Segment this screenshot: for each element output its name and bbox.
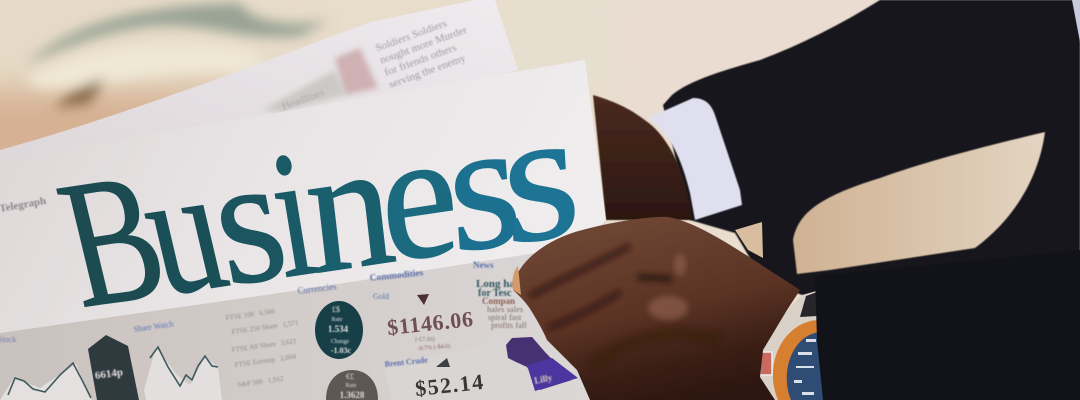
Commodities column: -0.7% (-$4.6) (417, 343, 450, 352)
front newspaper page (0, 60, 606, 400)
watch bezel (773, 320, 826, 400)
left line chart (0, 335, 92, 400)
blurred small text on back sheet: Soldiers Soldiers (374, 17, 448, 54)
data table: FTSE 250 Share 1,571 (231, 319, 299, 336)
cuff edge of near sleeve (815, 250, 1080, 400)
purple stat icon: Lilly (533, 372, 554, 386)
front hand with fingers (512, 217, 800, 400)
News column: News (473, 260, 494, 270)
teal currency badge (315, 301, 363, 359)
teal currency badge: Change (331, 339, 350, 345)
fingernail (512, 266, 521, 295)
blurred small text on back sheet: nought more Murder (378, 24, 469, 67)
data table (225, 307, 299, 389)
News column: Long ha (476, 278, 515, 290)
data table: S&P 500 1,912 (237, 375, 285, 389)
dark pentagon stat tag (88, 335, 139, 400)
teal currency badge: -1.03c (331, 346, 352, 355)
headline: Business: e (371, 91, 466, 302)
News column: profits fall (491, 320, 527, 330)
grey currency badge: €£ (346, 372, 354, 381)
blurred picture on back sheet (335, 48, 378, 95)
data table: FTSE Eurotop 2,004 (234, 352, 297, 369)
Commodities column: (-£7.60) (415, 336, 435, 343)
data table: FTSE 100 6,566 (225, 307, 276, 322)
Currencies label: Currencies (297, 281, 337, 296)
far hand (593, 95, 692, 220)
Commodities column (369, 268, 512, 400)
panel: crude oil (384, 346, 512, 400)
wristwatch (760, 290, 826, 400)
grey currency badge (326, 370, 378, 400)
News column: for Tesc (478, 288, 512, 299)
grey currency badge: Rate (346, 383, 357, 389)
window between arm and torso (793, 132, 1045, 274)
strap lug (800, 292, 817, 317)
down arrow (417, 294, 429, 305)
right line chart: Share Watch (133, 319, 174, 334)
blurred small text on back sheet: Headlines (280, 87, 326, 113)
blurred small text on back sheet: serving the enemy (387, 52, 468, 91)
grey currency badge: 1.3628 (340, 390, 365, 400)
headline: Business: B (43, 135, 182, 346)
headline: Business: s (197, 117, 300, 325)
knuckle highlights (648, 296, 688, 320)
data table: FTSE All Share 3,621 (231, 337, 297, 354)
headline: Business: u (125, 129, 242, 334)
teal currency badge: 1.534 (328, 324, 349, 334)
headline: Business: i (258, 112, 328, 316)
headline: Business: s (441, 79, 527, 292)
up arrow (436, 358, 450, 367)
News column: spiral fast (488, 312, 522, 322)
watch dial (787, 332, 826, 400)
watch body (760, 290, 824, 400)
watch crown (760, 352, 772, 375)
dark suit arm and torso (663, 0, 1080, 300)
News column: hales sales (487, 304, 523, 314)
blurred small text on back sheet (272, 12, 478, 128)
background back newspaper sheet (0, 0, 518, 200)
News column: Compan (482, 296, 515, 306)
white shirt cuff (648, 98, 742, 220)
commodities label: Commodities (369, 268, 424, 284)
teal currency badge: Rate (332, 317, 343, 323)
dial marks (794, 339, 816, 395)
headline: Business (43, 67, 585, 346)
teal currency badge: £$ (332, 305, 340, 314)
News column (473, 260, 578, 391)
gold price: $1146.06 (386, 306, 474, 340)
gold label: Gold (373, 292, 389, 301)
brent crude label: Brent Crude (384, 355, 429, 369)
finger shadows (530, 246, 720, 365)
headline: Business: s (497, 67, 585, 285)
blurred small text on back sheet: for friends others (383, 42, 458, 79)
headline: Business: n (296, 101, 403, 312)
dark pentagon stat tag: 6614p (94, 366, 124, 382)
right line chart (133, 319, 222, 400)
